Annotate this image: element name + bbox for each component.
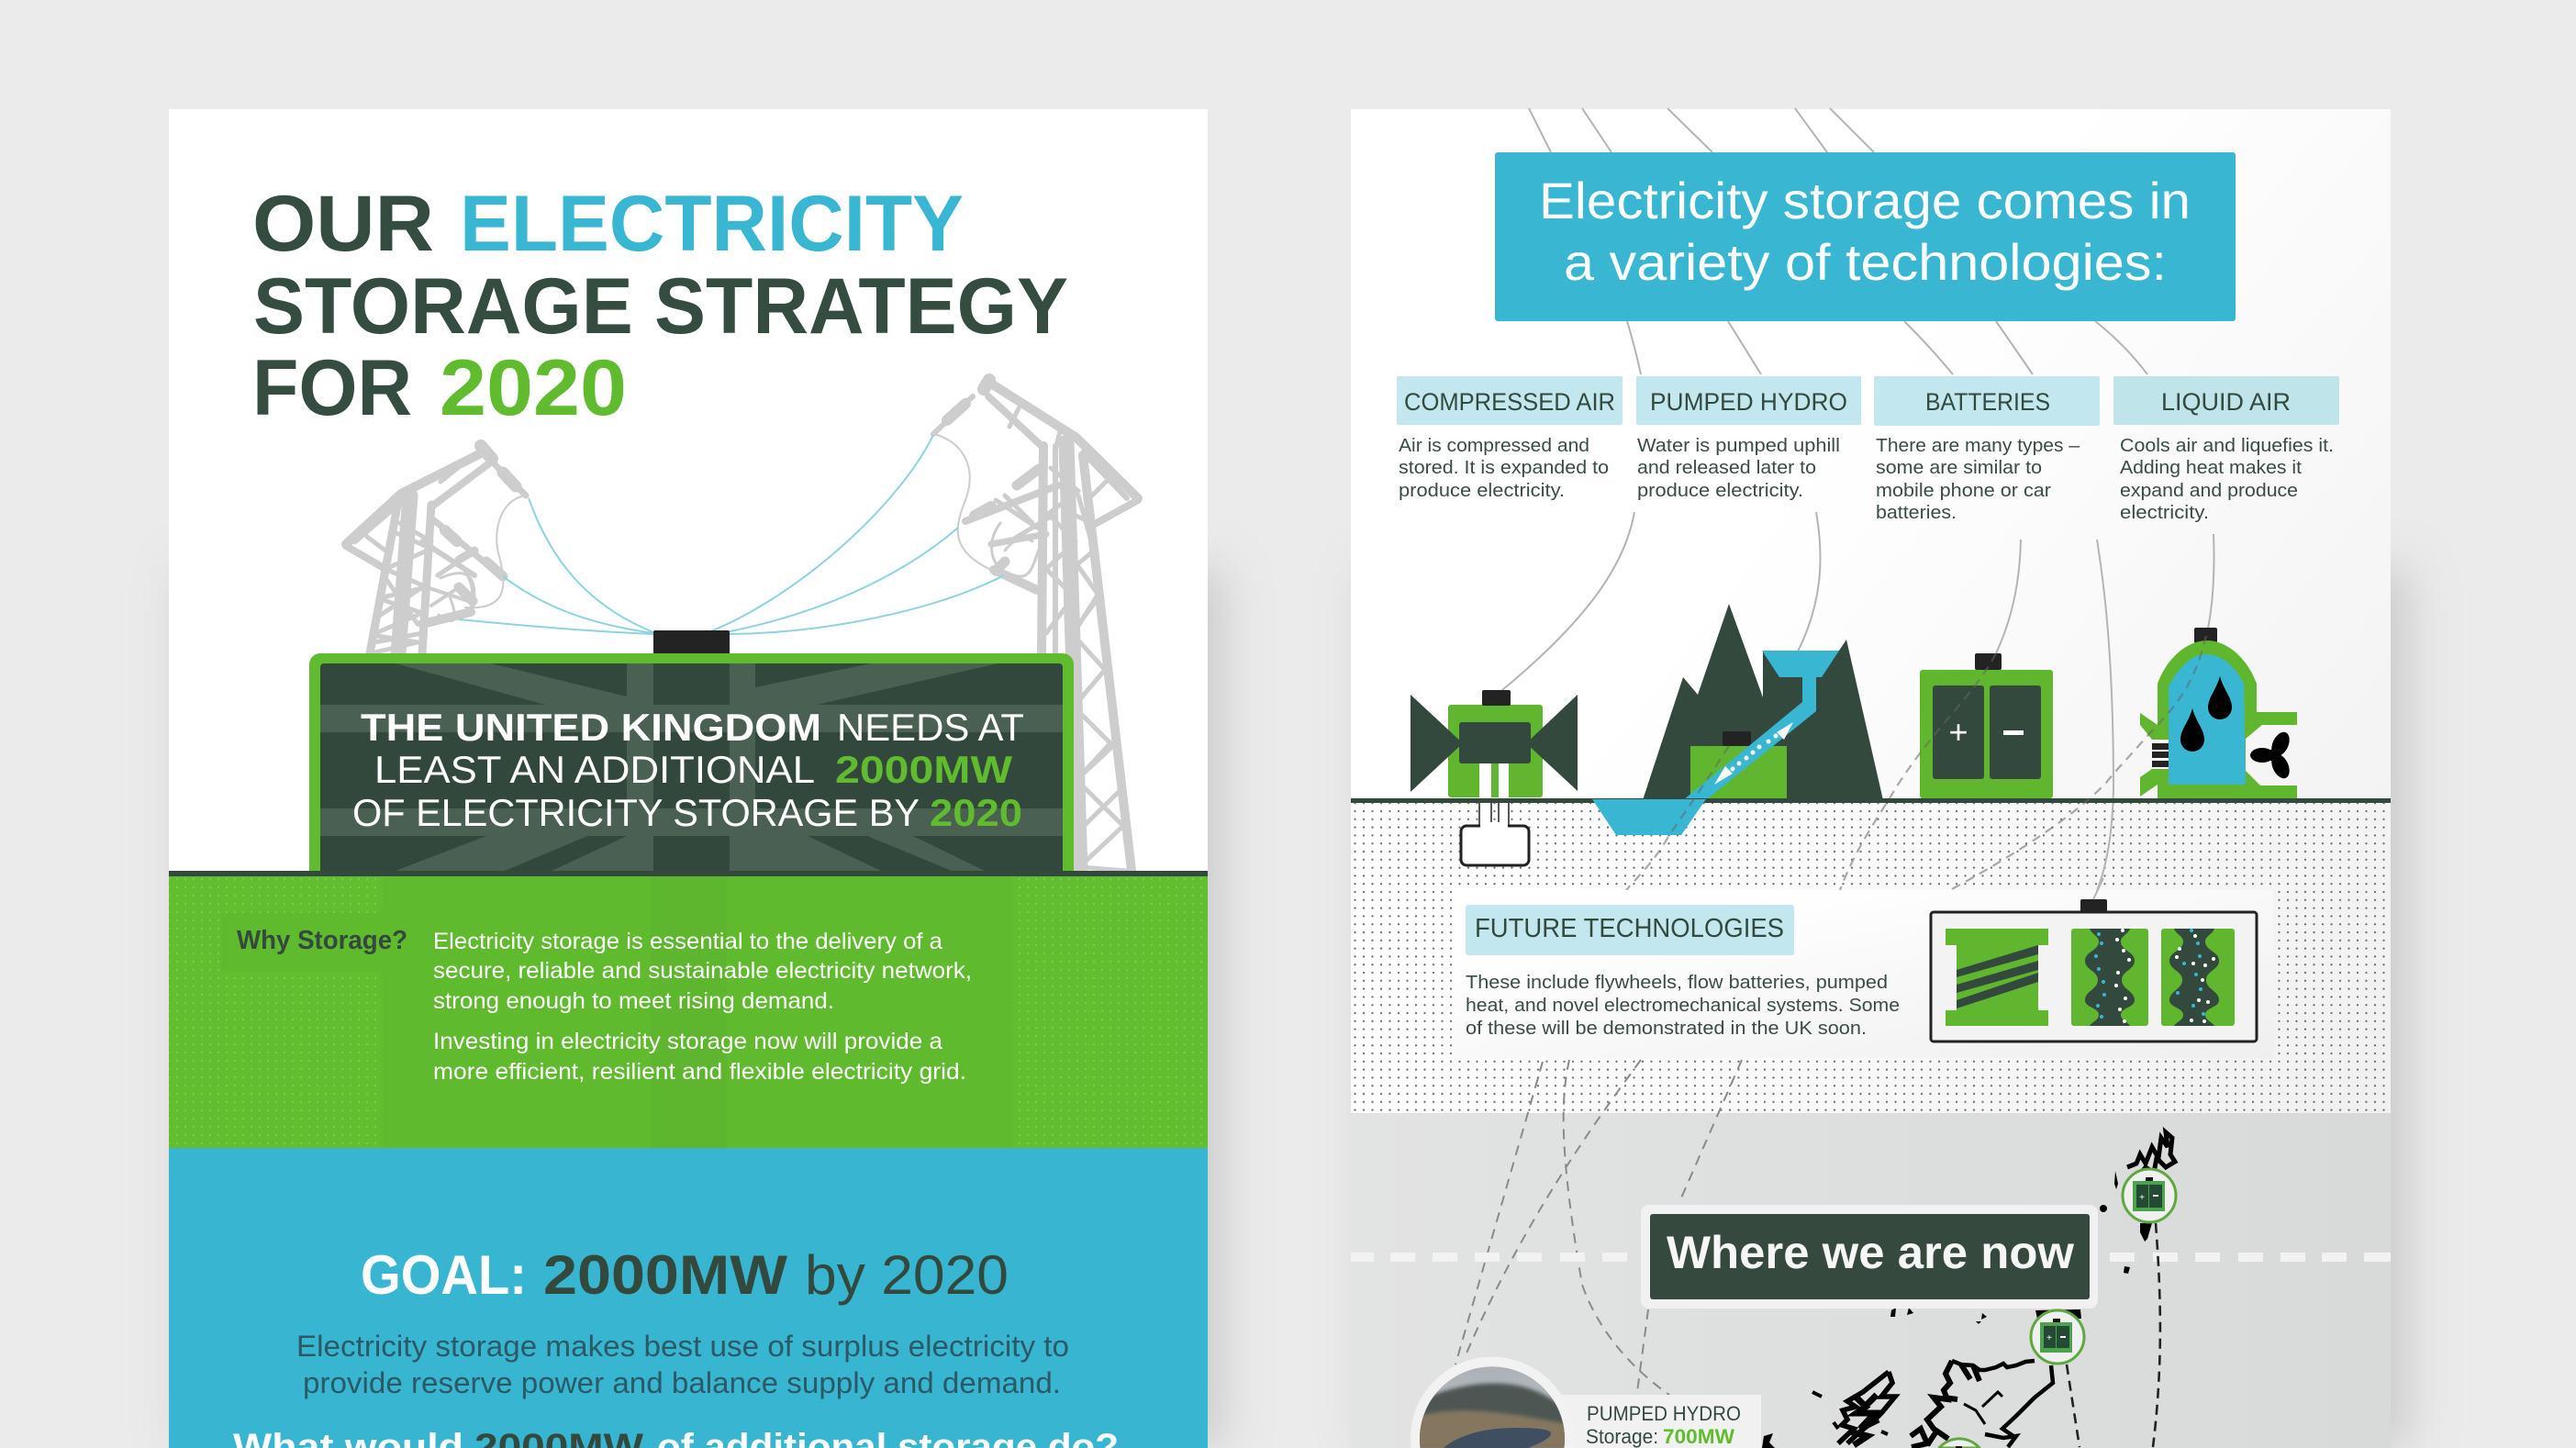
dotted side strips [169,876,1208,1148]
marker: Shetland battery [2123,1169,2176,1222]
heading: electricity storage technologies: a variety of technologies: [1564,233,2167,291]
sign text: . [1024,802,1032,832]
sign text: OF ELECTRICITY STORAGE BY [352,791,920,834]
title: STORAGE STRATEGY [253,262,1068,351]
panel: goal [169,1148,1208,1448]
description: batteries: There are many types – [1876,436,2080,456]
pumped hydro callout: 700MW [1663,1425,1734,1448]
goal heading: 2000MW [543,1244,787,1306]
sign text: 2000MW [835,748,1012,791]
why storage body text: Investing in electricity storage now will provide a [433,1029,942,1054]
blue band [169,1148,1208,1448]
why storage body text [433,929,972,1085]
description: liquid air: expand and produce [2120,481,2298,501]
description: pumped hydro: and released later to [1637,458,1816,478]
description: compressed air: stored. It is expanded to [1399,458,1609,478]
dashed connectors through icons [1626,636,2206,890]
description: liquid air: Adding heat makes it [2120,458,2302,478]
technology tag: compressed air: COMPRESSED AIR [1404,388,1615,416]
terminal on battery sign [653,630,730,654]
map: Scotland and islands [1762,1132,2175,1448]
sign text: 2020 [930,791,1022,834]
panel: left poster [169,109,1208,1448]
description: liquid air: Cools air and liquefies it. [2120,436,2334,456]
description: compressed air [1399,436,1609,501]
union flag pattern [320,663,1063,871]
title: FOR [252,344,412,432]
future description: heat, and novel electromechanical systems. Some [1466,996,1900,1016]
green band [169,876,1208,1148]
icon: battery [1920,653,2053,798]
left pylon [346,446,526,653]
panel: why storage [169,876,1208,1148]
left poster white background [169,109,1208,1448]
goal heading: GOAL: [361,1244,527,1306]
icon: liquid air [2140,628,2297,798]
goal heading: by 2020 [805,1244,1009,1306]
description: compressed air: produce electricity. [1399,481,1565,501]
sign text: NEEDS AT [837,706,1024,749]
dashed connectors to map [1455,1060,1742,1395]
future technologies tag [1466,905,1794,955]
question heading [233,1432,1117,1448]
description: liquid air: electricity. [2120,503,2209,523]
blue power cables [459,435,1004,634]
heading: electricity storage technologies [1495,152,2236,321]
panel: right poster [1351,108,2391,1448]
marker: Shetland battery: + [2139,1193,2145,1203]
panel: future technologies [1453,890,2273,1058]
marker: Orkney battery: + [2046,1333,2052,1343]
dotted underground [1351,803,2391,1113]
goal description [296,1330,1069,1399]
description: liquid air [2120,436,2334,523]
description: batteries: mobile phone or car [1876,481,2051,501]
icon: future technology battery [1931,899,2257,1041]
technology tag: pumped hydro [1636,376,1861,425]
technology tag: pumped hydro: PUMPED HYDRO [1650,388,1847,416]
heading: electricity storage technologies: Electricity storage comes in [1539,172,2191,229]
description: pumped hydro: Water is pumped uphill [1637,436,1840,456]
title: OUR [252,180,434,268]
sign text: LEAST AN ADDITIONAL [374,748,815,791]
map background [1351,1113,2391,1448]
icon: battery: + [1948,713,1968,751]
connector lines upper [1502,108,2214,899]
future description: of these will be demonstrated in the UK soon. [1466,1019,1867,1039]
description: batteries [1876,436,2080,523]
why storage label [221,913,407,973]
sign text [352,706,1032,834]
marker routes [2067,1223,2160,1447]
description: batteries: some are similar to [1876,458,2042,478]
panel: where we are now map [1351,1060,2391,1448]
centre panel [383,876,1012,1148]
sign green frame [309,653,1074,871]
why storage body text: strong enough to meet rising demand. [433,988,834,1014]
technology tag: liquid air [2113,376,2339,425]
battery sign with flag [309,653,1074,874]
goal description: Electricity storage makes best use of surplus electricity to [296,1330,1069,1363]
pumped hydro callout: Storage: [1586,1425,1658,1448]
icon: pumped hydro mountain [1643,604,1883,802]
why storage body text: secure, reliable and sustainable electricity network, [433,958,972,984]
description: pumped hydro: produce electricity. [1637,481,1803,501]
where we are now heading: Where we are now [1667,1227,2074,1278]
technology tag: compressed air [1397,376,1623,425]
right poster background [1351,109,2391,1448]
photo: reservoir in mountains [1411,1357,1574,1448]
pumped hydro callout: PUMPED HYDRO [1587,1402,1741,1425]
panel shadows [184,569,2408,1448]
centre darker strip [651,876,727,1148]
future description: These include flywheels, flow batteries, pumped [1466,973,1888,993]
marker: Orkney battery [2031,1310,2084,1364]
where we are now heading [1641,1205,2098,1309]
why storage label: Why Storage? [237,926,407,955]
pumped hydro callout [1560,1395,1761,1448]
sign dark inner [320,663,1063,874]
technology tag: batteries [1874,376,2100,426]
future technologies tag: FUTURE TECHNOLOGIES [1475,914,1784,943]
marker: Scotland battery [1939,1439,1979,1448]
description: batteries: batteries. [1876,503,1957,523]
white dashed divider [1351,1253,2391,1262]
ground line [169,871,1208,876]
technology tag: batteries: BATTERIES [1925,388,2050,416]
goal description: provide reserve power and balance supply and demand. [303,1366,1061,1399]
title: 2020 [440,344,627,432]
future panel background [1453,890,2273,1058]
ground line right [1351,798,2391,803]
goal heading [362,1253,1006,1305]
description: pumped hydro [1637,436,1840,501]
right pylon [933,380,1138,871]
title [252,180,1068,432]
technology tag: liquid air: LIQUID AIR [2161,388,2291,416]
future description [1466,973,1900,1039]
icon: compressed air storage [1411,690,1578,865]
lower reservoir [1592,799,1706,835]
connector to future technology battery [2093,878,2103,899]
description: compressed air: Air is compressed and [1399,436,1589,456]
sign text: THE UNITED KINGDOM [361,706,821,749]
why storage body text: more efficient, resilient and flexible electricity grid. [433,1059,966,1085]
why storage body text: Electricity storage is essential to the delivery of a [433,929,942,954]
title: ELECTRICITY [460,180,964,268]
